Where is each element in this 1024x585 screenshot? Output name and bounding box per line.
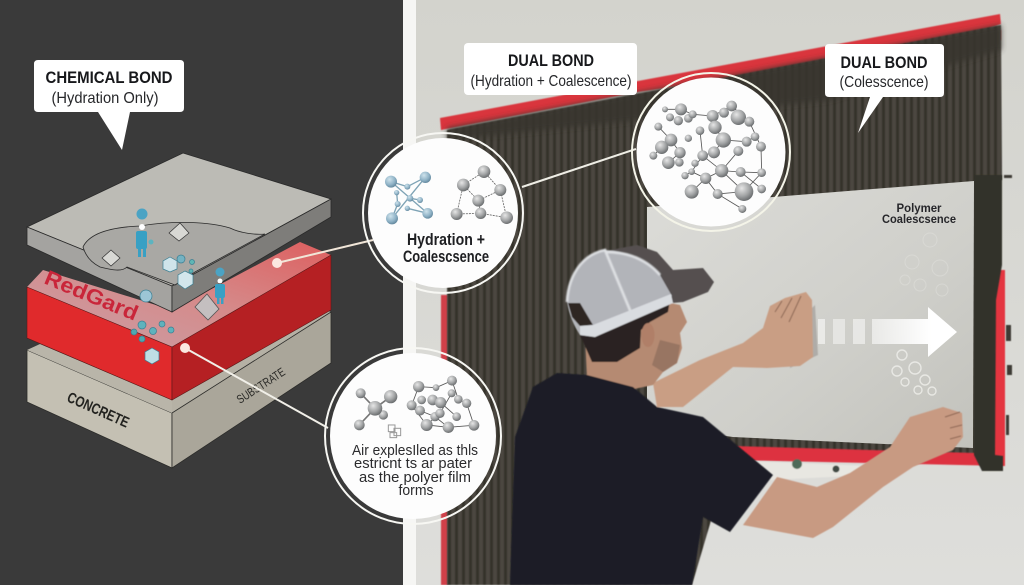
magnifier: polymer coalescence molecule [632,73,790,231]
crystals in pocket [102,223,189,266]
air expelled caption [352,443,478,499]
polymer coalescence label: Coalescsence [882,212,956,226]
shirt [510,373,773,585]
cap rear opening [568,303,593,326]
RedGard label: RedGard [41,266,141,326]
polymer coalescence label: Polymer [896,201,942,215]
neck and face [585,303,687,392]
callout: chemical bond: (Hydration Only) [52,90,158,107]
wall mortar stains [745,461,870,480]
installer man [510,245,963,585]
hand shadow on tile [790,305,818,368]
trowelled mortar bed [447,25,1002,585]
lower hand finger lines [945,412,962,439]
upper arm and hand [653,292,813,407]
lower arm and hand [743,407,963,538]
divider white gap [403,0,416,585]
air expelled caption: estricnt ts ar pater [354,456,472,472]
blue hydration figure lower [215,268,225,304]
leader line between circles [522,149,636,187]
concrete substrate layer [27,308,331,468]
hair [580,300,670,362]
large format tile [647,181,974,448]
RedGard membrane layer [27,242,331,400]
callout: dual bond coalescence [825,44,944,133]
leader line to air expulsion circle [180,343,328,428]
polymer coalescence label [882,201,956,226]
magnifier: hydration and coalescence [363,133,523,293]
blue hydration figure upper [136,208,154,257]
upper hand finger lines [775,296,801,322]
wall background [416,0,1024,585]
air expelled caption: Air explesIled as thls [352,443,478,459]
callout: dual bond hydration plus coalescence: (Hydration + Coalescence) [470,73,632,90]
panel: right photo of tile installation [416,0,1024,585]
hydration crystal cubes [131,255,194,364]
callout: dual bond coalescence: DUAL BOND [840,53,928,72]
concrete label: CONCRETE [64,389,132,431]
layered bond diagram [27,153,331,468]
pocket cavity [83,222,265,285]
air expelled caption: as the polyer film [359,470,471,486]
callout: dual bond hydration plus coalescence: DUAL BOND [508,51,594,70]
substrate label: SUBSTRATE [234,365,288,407]
white direction arrow [818,307,957,357]
cap band [580,294,673,337]
air expelled caption: forms [398,483,434,499]
hydration plus coalescence label: Hydration + [407,230,485,249]
cap mesh [567,250,672,337]
red waterproofing membrane border [440,14,1005,585]
faint molecule lower on tile [892,350,936,395]
grey coalescing molecule [451,165,513,224]
hydration plus coalescence label [403,230,489,266]
faint molecule upper on tile [900,233,948,296]
blue hydration molecule [385,172,433,224]
wall right texture flecks [1004,175,1012,435]
magnifier: air expelled as polymer film forms [325,348,501,524]
dense molecule [649,101,766,213]
darker unstriped top band of mortar [447,25,1001,140]
callout: chemical bond: CHEMICAL BOND [46,68,172,87]
leader line to hydration circle [272,240,373,268]
molecules [354,376,479,438]
grey ettringite crystal [195,294,219,320]
mortar right edge [974,175,1003,471]
callout: dual bond coalescence: (Colesscence) [840,74,928,91]
cap front panel and brim [600,245,714,303]
callout: chemical bond [34,60,184,150]
panel: left dark background [0,0,403,585]
callout: dual bond hydration plus coalescence [464,43,637,95]
top mortar slab with pocket [27,153,331,312]
hydration plus coalescence label: Coalescsence [403,247,489,266]
stubble [652,340,680,372]
cap rim and ribs [567,250,660,315]
ear [642,323,654,347]
